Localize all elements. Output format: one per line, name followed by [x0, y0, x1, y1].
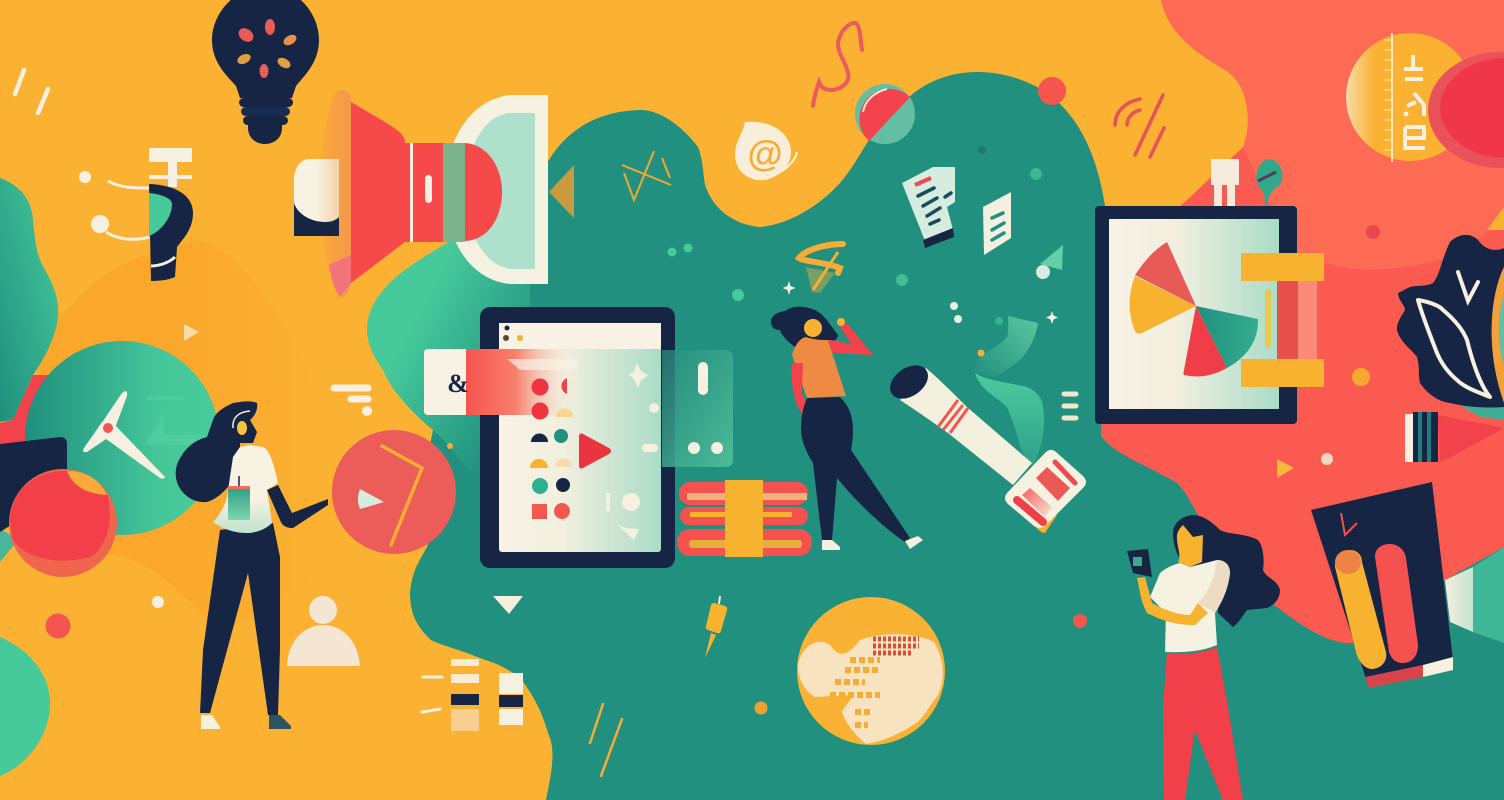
blob: lower-left green	[0, 637, 50, 776]
document one	[902, 167, 955, 241]
teal corner patch	[0, 528, 18, 562]
circle: red play	[332, 430, 456, 554]
megaphone cone and neck	[351, 102, 405, 283]
framed pie chart	[1095, 206, 1324, 424]
feet	[201, 715, 220, 729]
squiggle	[813, 23, 862, 106]
navy poster with tubes	[1311, 482, 1453, 688]
darker yellow hill	[30, 240, 345, 640]
banner tab	[466, 349, 576, 415]
short white lines	[1064, 394, 1076, 418]
shirt	[213, 445, 278, 533]
arcs: wifi	[1115, 95, 1164, 157]
telescope head	[1005, 450, 1086, 528]
tablet	[424, 307, 733, 568]
ruler glyphs	[1404, 55, 1425, 148]
blob: left green	[0, 178, 58, 422]
pants	[200, 523, 280, 715]
triangle on teal	[493, 596, 523, 614]
play arrow	[579, 433, 611, 469]
icon: lightbulb	[212, 0, 319, 144]
navy block left	[0, 437, 67, 532]
yellow tube	[1335, 550, 1386, 669]
right pale block	[1445, 547, 1504, 643]
legs	[801, 397, 910, 542]
left arm	[792, 363, 815, 429]
dot near right person	[1073, 614, 1087, 628]
icon: megaphone	[294, 90, 574, 298]
icon: windmill	[83, 391, 165, 479]
top	[792, 337, 846, 398]
screen sparkles and shapes	[629, 363, 648, 388]
dots left	[152, 596, 164, 608]
stacked pads	[677, 480, 812, 557]
leaf edge	[1492, 267, 1504, 403]
icon: yellow swoosh	[799, 244, 843, 293]
arm	[267, 485, 328, 528]
head	[804, 319, 822, 337]
small triangle left	[184, 324, 199, 341]
arm	[1137, 577, 1208, 625]
megaphone rim	[321, 90, 351, 298]
balloon ball	[855, 84, 915, 144]
yellow corner	[1030, 515, 1057, 533]
blob: coral	[1101, 0, 1504, 643]
icon: at sign badge	[735, 122, 797, 180]
lower yellow field	[0, 553, 320, 800]
hand and arm	[828, 323, 873, 355]
icon: at sign badge: @	[747, 133, 783, 174]
circle: teal with windmill	[25, 341, 219, 535]
dots on teal	[668, 168, 1042, 325]
hair	[176, 401, 257, 502]
document icons	[902, 167, 1011, 255]
striped prism	[1405, 412, 1504, 463]
person: right	[1127, 515, 1280, 800]
person: left	[176, 401, 337, 729]
ruler circle	[1346, 33, 1504, 168]
top plugs	[1211, 159, 1283, 206]
ruler ticks	[1391, 33, 1393, 162]
dot on teal bottom	[754, 702, 768, 714]
bulb petals	[265, 19, 275, 35]
ribbon	[975, 316, 1044, 467]
hair	[1173, 515, 1280, 627]
icon: gadget left	[79, 148, 193, 281]
globe	[797, 597, 945, 745]
tool: pen	[705, 596, 727, 658]
megaphone handle	[294, 159, 339, 236]
pants	[1163, 647, 1243, 800]
tablet: &	[447, 369, 469, 398]
ticks: top-left	[15, 70, 48, 113]
megaphone dish	[445, 95, 548, 284]
small circles and triangles right	[1352, 368, 1370, 386]
pie slices	[1130, 242, 1258, 376]
right tabs	[1265, 289, 1271, 348]
small triangle and dot	[1036, 245, 1063, 279]
zigzag lines	[622, 151, 671, 200]
red tube	[1375, 544, 1418, 663]
hair	[771, 307, 838, 347]
blob: lighter coral upper area	[1161, 0, 1504, 270]
shirt	[1150, 560, 1230, 652]
land masses	[798, 634, 943, 744]
navy leaf	[1397, 235, 1504, 408]
red shape behind circle	[0, 375, 50, 450]
badge card	[228, 487, 250, 520]
blob: light green	[367, 180, 530, 482]
shoes	[822, 536, 923, 550]
red ellipse	[1428, 52, 1504, 168]
circle: red	[9, 469, 117, 577]
telescope cap	[884, 358, 934, 406]
red dot	[1038, 77, 1066, 105]
sparkles	[782, 281, 1058, 324]
telescope tube	[900, 368, 1032, 485]
phone	[1127, 549, 1152, 577]
side panel	[662, 350, 733, 467]
blob: teal	[410, 72, 1504, 800]
face	[237, 421, 247, 435]
person: center	[771, 307, 923, 550]
telescope	[884, 358, 1086, 533]
face	[1177, 525, 1203, 567]
barcode blocks	[422, 659, 523, 731]
short wavy lines	[334, 388, 372, 416]
yellow diagonal lines	[590, 704, 622, 776]
document two	[983, 192, 1011, 255]
small triangle	[549, 165, 574, 218]
icon rows	[532, 378, 548, 396]
teal crescent under leaf	[1460, 405, 1504, 420]
icon: user avatar	[287, 596, 360, 666]
land detail	[873, 639, 919, 653]
